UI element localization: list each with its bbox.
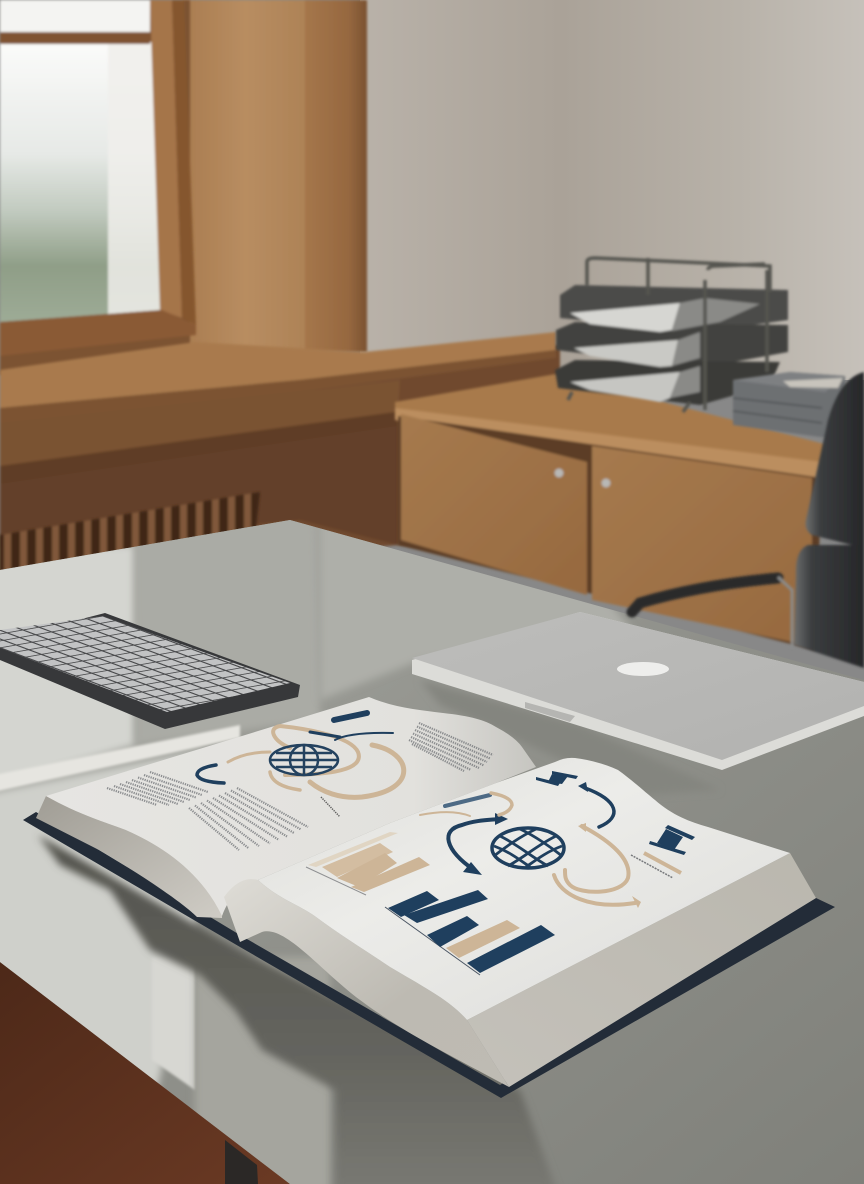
right page tan bar chart [306, 832, 430, 895]
left page tan arrows [228, 726, 404, 797]
left page text lines [107, 723, 493, 850]
right page [258, 758, 790, 1020]
right page tan arrows [420, 793, 641, 908]
book cover [23, 812, 835, 1098]
desk surface [0, 510, 864, 1184]
left page navy arrows [197, 713, 393, 783]
stack of grey books [733, 372, 845, 438]
wainscot and sill [0, 332, 560, 575]
spool icon right [649, 825, 695, 855]
tan caption bar [631, 853, 681, 878]
keyboard [0, 613, 300, 729]
apple logo [617, 662, 669, 676]
open book [23, 697, 835, 1098]
right page navy bar chart [385, 890, 555, 975]
right page block [467, 853, 816, 1087]
chair [632, 372, 864, 668]
cabinet right door [592, 446, 812, 646]
laptop [412, 612, 864, 770]
book reflection [38, 835, 560, 1184]
spool icon top [536, 771, 578, 786]
cabinet handles [554, 468, 610, 488]
right page globe [492, 828, 564, 868]
left page [46, 697, 536, 916]
left page block [36, 796, 222, 918]
wood wall panel and pillar [183, 0, 367, 352]
paper tray [555, 258, 788, 412]
right page navy arrows [445, 782, 614, 875]
floor [0, 950, 300, 1184]
cabinet [395, 374, 832, 650]
cabinet left door [401, 414, 587, 595]
right page inner curl [224, 879, 509, 1087]
desk reflections [0, 510, 720, 1184]
background wall [360, 0, 864, 380]
window [0, 0, 196, 375]
desk leg [225, 1140, 258, 1184]
radiator [0, 492, 260, 576]
left page globe [270, 745, 338, 775]
